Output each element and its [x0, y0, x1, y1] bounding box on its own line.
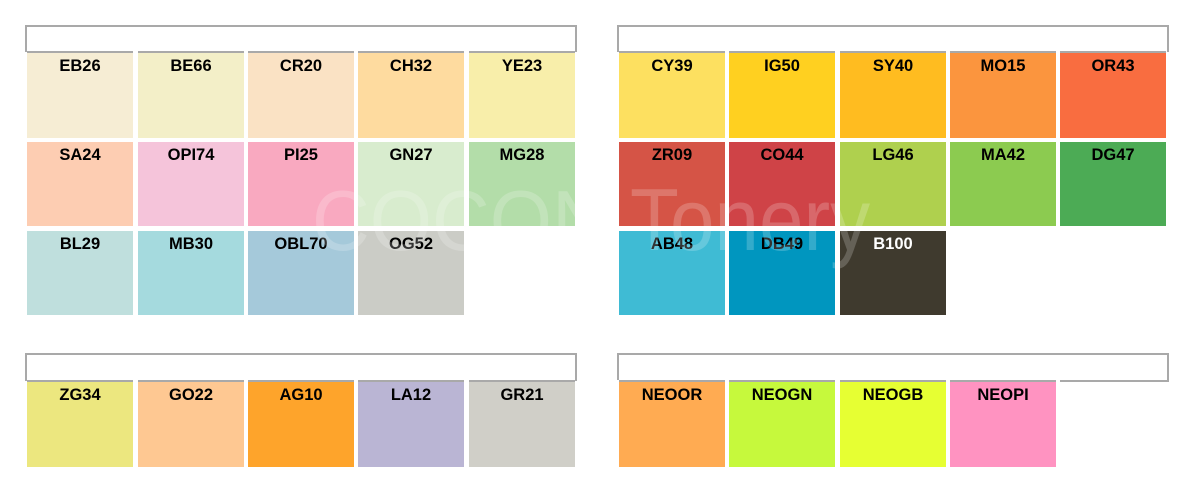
- swatch: YE23: YE23: [502, 57, 542, 75]
- swatch: LA12: [358, 380, 464, 467]
- swatch: CH32: [358, 51, 464, 138]
- swatch: CR20: [248, 51, 354, 138]
- swatch: AB48: AB48: [651, 235, 693, 253]
- swatch: NEOPI: [950, 380, 1056, 467]
- swatch: ZG34: [27, 380, 133, 467]
- swatch: SA24: [27, 142, 133, 226]
- swatch: CY39: CY39: [651, 57, 693, 75]
- swatch: MO15: MO15: [981, 57, 1025, 75]
- swatch: BL29: BL29: [60, 235, 100, 253]
- swatch: NEOOR: NEOOR: [642, 386, 702, 404]
- swatch: GN27: [358, 142, 464, 226]
- swatch: BE66: BE66: [170, 57, 212, 75]
- swatch: MG28: [469, 142, 575, 226]
- swatch: YE23: [469, 51, 575, 138]
- swatch: CR20: CR20: [280, 57, 322, 75]
- swatch: MB30: MB30: [169, 235, 213, 253]
- swatch: OG52: [358, 231, 464, 315]
- swatch: EB26: [27, 51, 133, 138]
- swatch: CO44: [729, 142, 835, 226]
- swatch: GN27: GN27: [389, 146, 433, 164]
- swatch: OBL70: [248, 231, 354, 315]
- watermark: COCON: [312, 173, 610, 269]
- swatch: NEOGB: NEOGB: [863, 386, 923, 404]
- swatch: LA12: LA12: [391, 386, 431, 404]
- swatch: ZR09: [619, 142, 725, 226]
- swatch: ZR09: ZR09: [652, 146, 692, 164]
- swatch: NEOGN: [729, 380, 835, 467]
- heading box: pastel colours: [25, 25, 577, 52]
- heading box: intensive colours: [617, 25, 1169, 52]
- swatch: ZG34: ZG34: [59, 386, 101, 404]
- swatch: NEOOR: [619, 380, 725, 467]
- swatch: BL29: [27, 231, 133, 315]
- swatch: PI25: [248, 142, 354, 226]
- swatch: PI25: PI25: [284, 146, 318, 164]
- swatch: DG47: [1060, 142, 1166, 226]
- swatch: GR21: [469, 380, 575, 467]
- swatch: OPI74: [138, 142, 244, 226]
- swatch: OR43: [1060, 51, 1166, 138]
- swatch: BE66: [138, 51, 244, 138]
- swatch: LG46: LG46: [872, 146, 914, 164]
- white gap over heading box bottom edge: [617, 380, 1060, 382]
- swatch: CY39: [619, 51, 725, 138]
- swatch: MB30: [138, 231, 244, 315]
- swatch: EB26: EB26: [59, 57, 101, 75]
- swatch: OR43: OR43: [1091, 57, 1135, 75]
- swatch: LG46: [840, 142, 946, 226]
- swatch: AB48: [619, 231, 725, 315]
- swatch: CH32: CH32: [390, 57, 432, 75]
- swatch: DB49: [729, 231, 835, 315]
- swatch: DG47: DG47: [1091, 146, 1135, 164]
- swatch: NEOPI: NEOPI: [977, 386, 1029, 404]
- swatch: B100: B100: [873, 235, 913, 253]
- swatch: MG28: MG28: [500, 146, 544, 164]
- heading box: neon colours: [617, 353, 1169, 382]
- swatch: MO15: [950, 51, 1056, 138]
- swatch: IG50: [729, 51, 835, 138]
- swatch: DB49: DB49: [761, 235, 803, 253]
- swatch: AG10: AG10: [279, 386, 323, 404]
- swatch: SY40: [840, 51, 946, 138]
- swatch: OPI74: OPI74: [168, 146, 214, 164]
- swatch: AG10: [248, 380, 354, 467]
- heading box: medium colours: [25, 353, 577, 381]
- swatch: OBL70: OBL70: [274, 235, 328, 253]
- swatch: GO22: GO22: [169, 386, 213, 404]
- swatch: OG52: OG52: [389, 235, 433, 253]
- swatch: CO44: CO44: [760, 146, 804, 164]
- swatch: GO22: [138, 380, 244, 467]
- swatch: IG50: IG50: [764, 57, 800, 75]
- swatch: MA42: MA42: [981, 146, 1025, 164]
- swatch: GR21: GR21: [500, 386, 544, 404]
- swatch: MA42: [950, 142, 1056, 226]
- swatch: NEOGN: NEOGN: [752, 386, 812, 404]
- swatch: SY40: SY40: [873, 57, 913, 75]
- watermark: Tonery: [630, 170, 870, 269]
- swatch: NEOGB: [840, 380, 946, 467]
- swatch: B100: [840, 231, 946, 315]
- swatch: SA24: SA24: [59, 146, 101, 164]
